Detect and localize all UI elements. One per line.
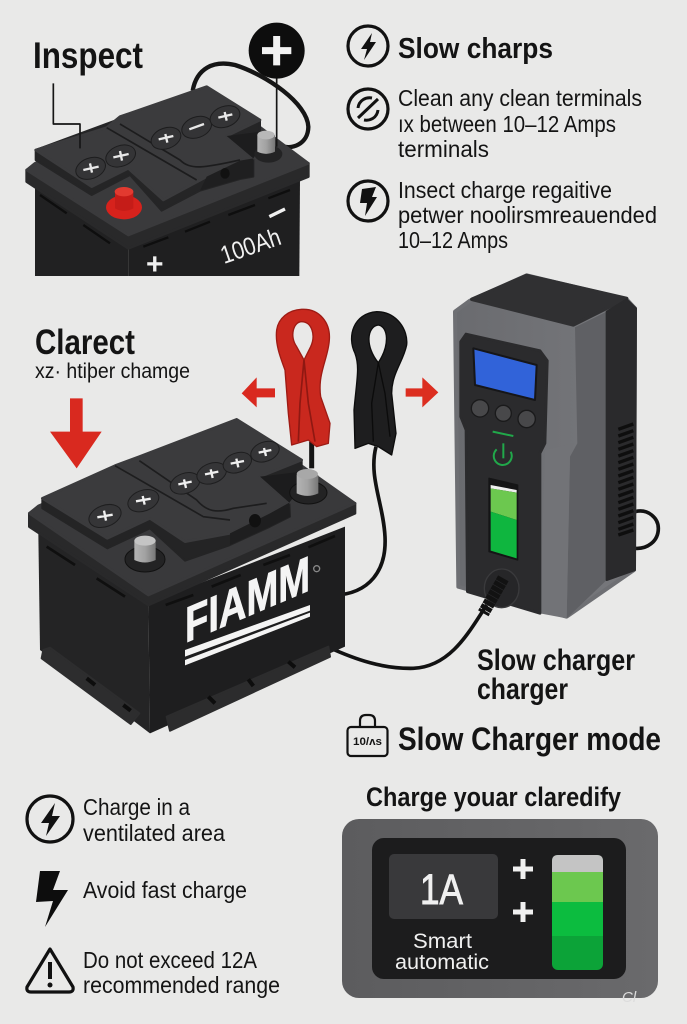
text: inspect charge: Insect charge regaitive xyxy=(398,177,612,203)
arrow: red right xyxy=(406,377,438,407)
text: clean terminals: ıx between 10–12 Amps xyxy=(398,111,616,137)
arrow: red left xyxy=(242,377,275,407)
watermark: Cl xyxy=(622,989,637,1006)
icon: bolt circle xyxy=(348,26,388,66)
icon: 10Ah case xyxy=(348,715,388,756)
amp readout box xyxy=(389,854,498,919)
plus signs xyxy=(513,859,533,922)
battery level gauge xyxy=(552,855,603,970)
cable strain relief xyxy=(483,569,519,613)
text: clean terminals xyxy=(398,85,642,162)
cable: red clamp wire xyxy=(304,442,319,468)
icon: red clamp xyxy=(276,309,330,447)
callout line to battery cover xyxy=(53,83,80,148)
cable: mains loop xyxy=(635,511,658,548)
FIAMM logo text: FIAMM xyxy=(185,545,310,654)
text: clean terminals: Clean any clean terminals xyxy=(398,85,642,111)
icon: ventilated bolt xyxy=(27,796,73,842)
icon: power symbol xyxy=(493,432,513,465)
battery capacity label: 100Ah xyxy=(217,223,285,270)
subheading: xz· htiþer chamge xyxy=(35,360,190,383)
logo stripes xyxy=(185,605,310,665)
text: inspect charge: petwer noolirsmreauended xyxy=(398,202,657,228)
icon: large bolt xyxy=(36,871,68,927)
icon: left battery terminal xyxy=(125,536,165,572)
charger body xyxy=(455,275,636,618)
plus mark on battery: + xyxy=(146,248,164,281)
text: clean terminals: terminals xyxy=(398,136,489,162)
heading: Inspect: Inspect xyxy=(33,35,143,76)
icon: black clamp xyxy=(352,312,407,455)
text: inspect charge xyxy=(398,177,657,253)
cable: charger to battery xyxy=(328,605,487,668)
icon: right battery terminal xyxy=(290,469,327,504)
text: do not exceed xyxy=(83,947,280,998)
display inner screen xyxy=(372,838,626,979)
icon: positive terminal red xyxy=(106,187,142,219)
icon: bolt circle second xyxy=(348,181,388,221)
amp value: 1A xyxy=(420,866,463,914)
text: ventilated area: Charge in a xyxy=(83,794,190,820)
label: Slow charger charger: charger xyxy=(477,673,568,706)
text: ventilated area: ventilated area xyxy=(83,820,225,846)
arrow: red down xyxy=(50,398,102,468)
text: ventilated area xyxy=(83,794,225,846)
cable: black clamp to battery xyxy=(333,447,385,595)
heading: Charge youar claredify: Charge youar claredify xyxy=(366,782,621,812)
text: avoid fast charge: Avoid fast charge xyxy=(83,877,247,903)
icon: clean terminals xyxy=(348,89,388,129)
panel: charger display xyxy=(342,819,658,998)
icon: warning triangle xyxy=(27,949,73,992)
charger illustration xyxy=(352,275,636,618)
text: do not exceed: recommended range xyxy=(83,972,280,998)
top battery illustration xyxy=(27,23,308,276)
mode label smart: Smart xyxy=(413,930,472,953)
wire loop to positive callout xyxy=(193,64,308,147)
vent slots xyxy=(618,424,633,535)
heading: Slow charps: Slow charps xyxy=(398,33,553,65)
control buttons xyxy=(471,400,535,428)
LCD screen xyxy=(473,348,537,400)
charger front panel xyxy=(461,334,547,613)
text: do not exceed: Do not exceed 12A xyxy=(83,947,258,973)
label: Slow charger charger xyxy=(477,644,635,706)
minus mark xyxy=(269,209,285,217)
charger cables xyxy=(328,447,658,668)
battery level meter xyxy=(489,478,518,560)
icon: negative terminal xyxy=(254,131,282,163)
mode label automatic: automatic xyxy=(395,951,489,974)
registered mark xyxy=(314,566,320,572)
main battery illustration xyxy=(29,309,355,733)
label: Slow charger charger: Slow charger xyxy=(477,644,635,677)
icon: 10Ah case: 10/ʌs xyxy=(353,736,382,748)
heading: Clarect: Clarect xyxy=(35,323,135,362)
text: inspect charge: 10–12 Amps xyxy=(398,227,508,253)
icon: plus badge xyxy=(249,23,305,79)
